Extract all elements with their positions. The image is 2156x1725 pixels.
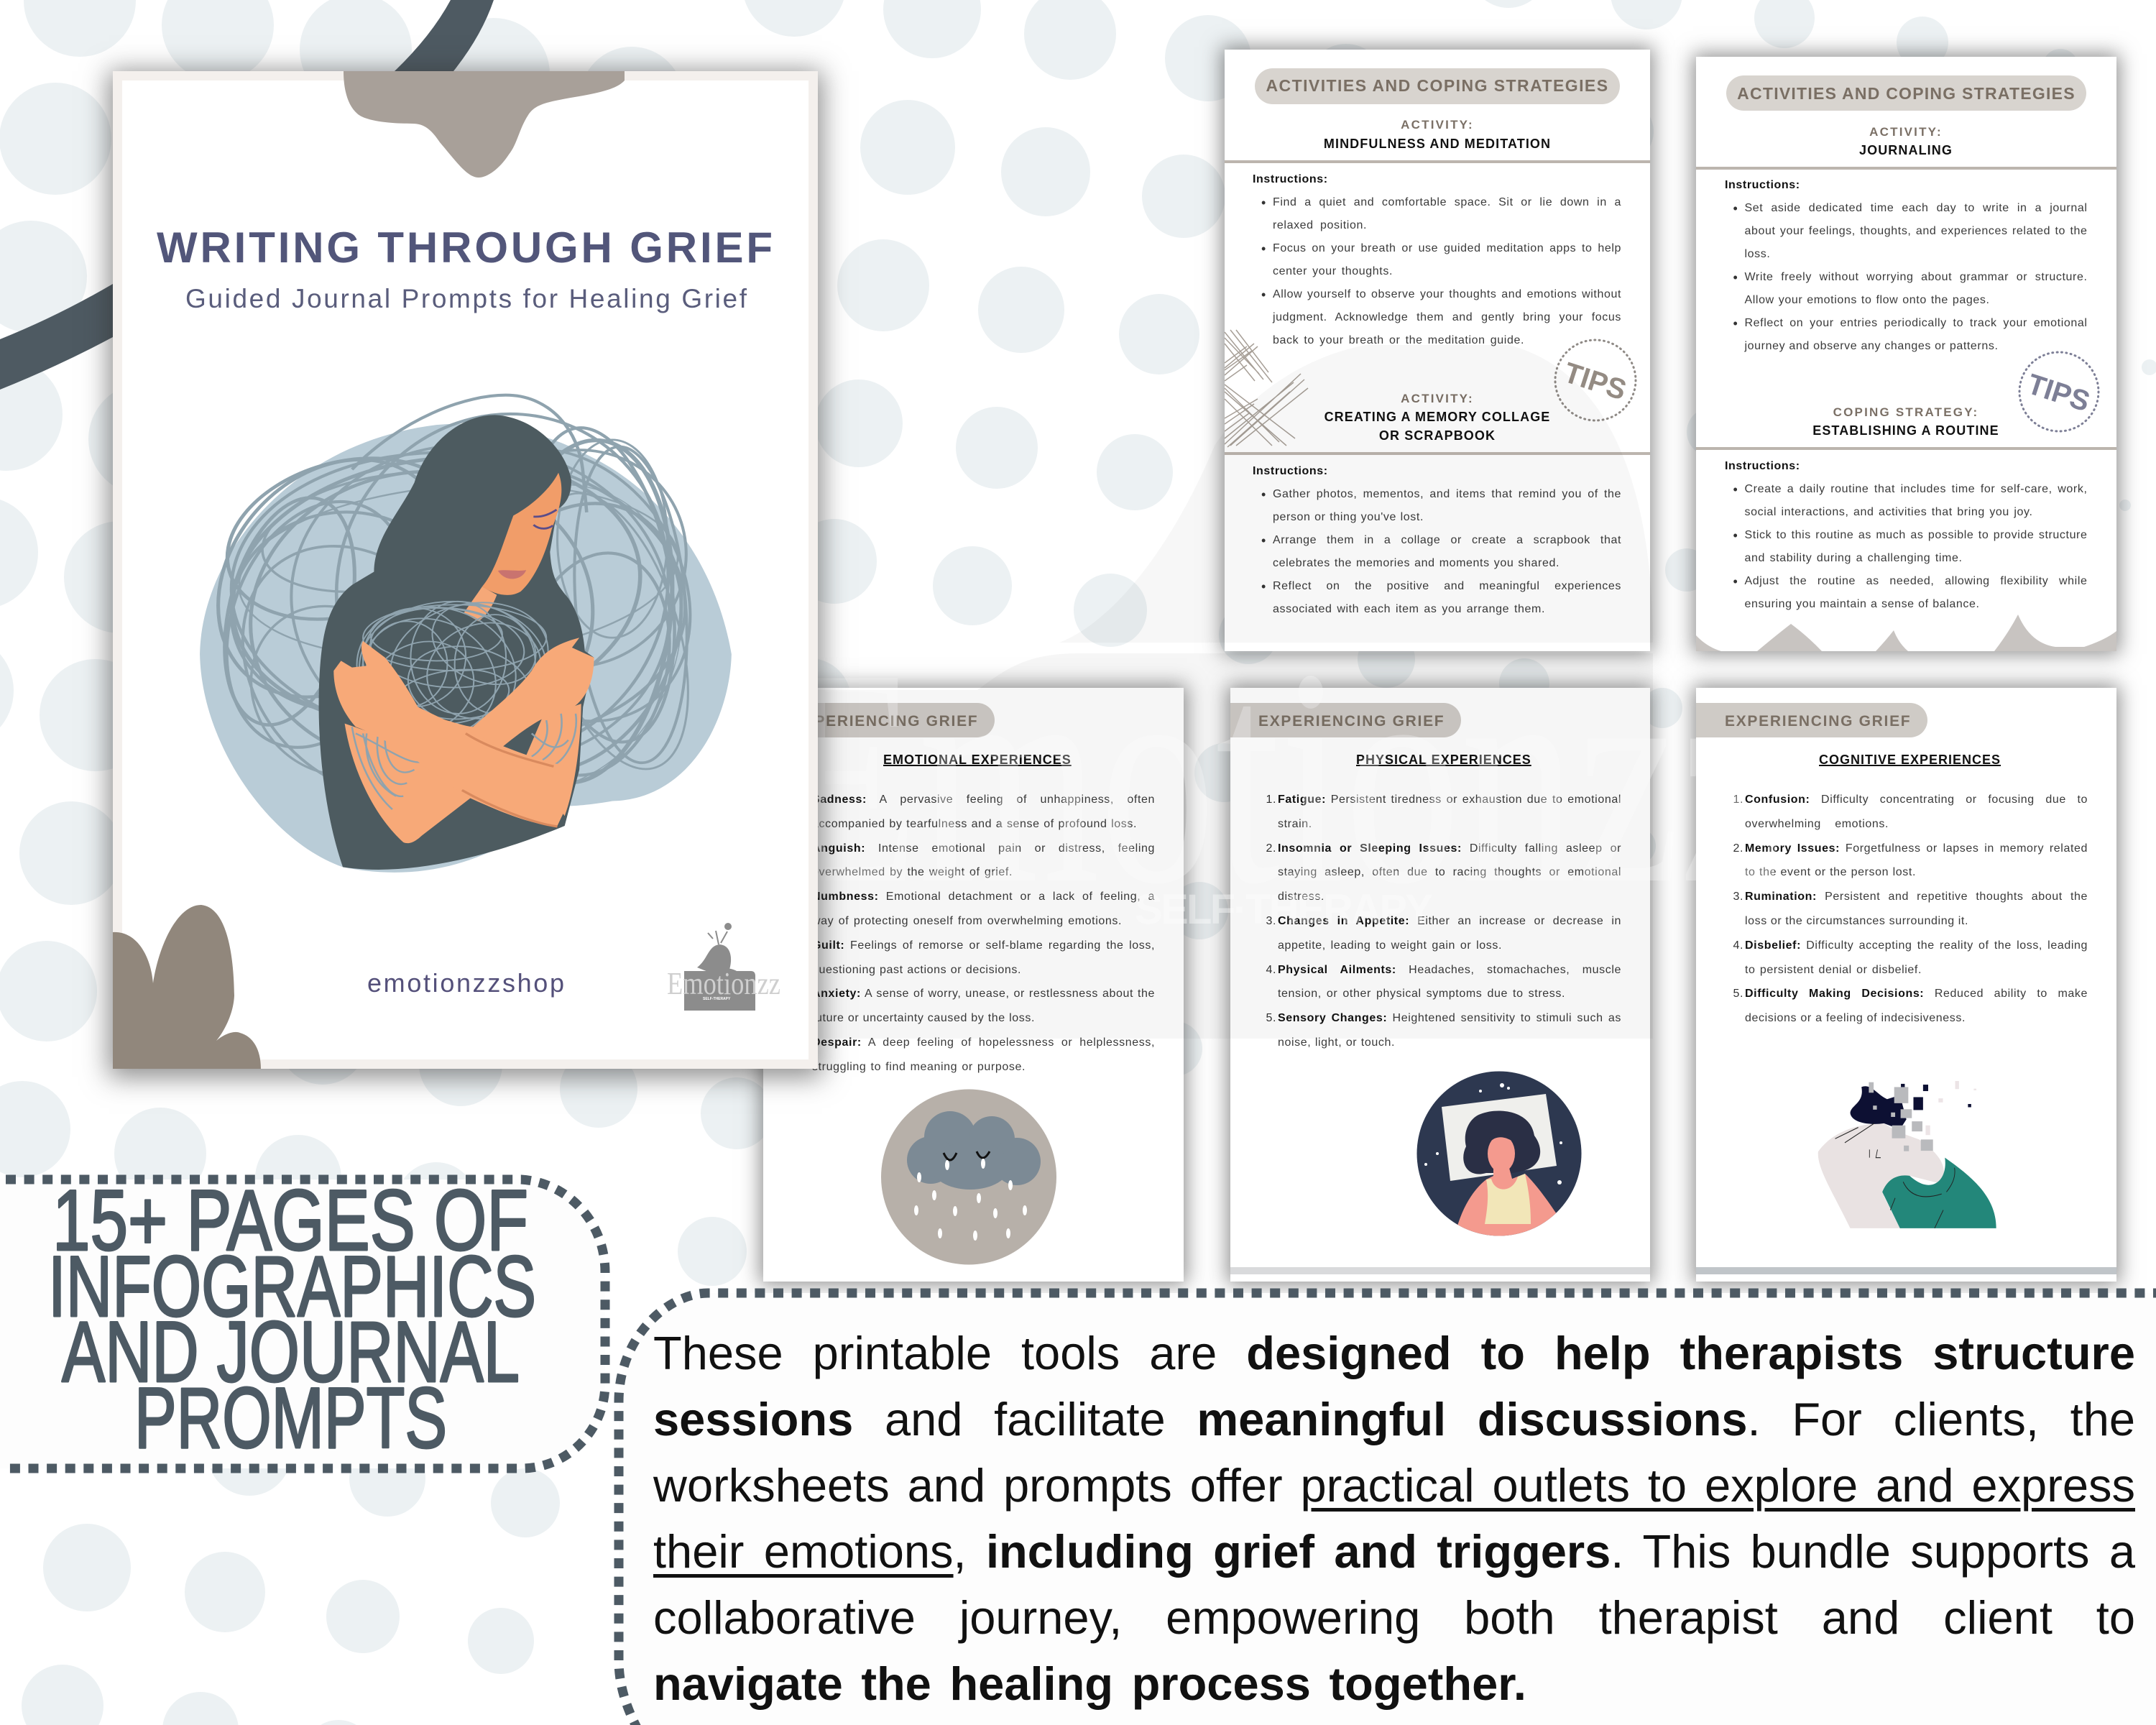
page: activities, journaling and routine [1696,57,2116,651]
cover: shop name: emotionzzshop [367,968,564,998]
cognitive experiences list: Difficulty Making Decisions: Reduced ability to make [1745,988,2088,1000]
icon: sleepless woman on pillow [1417,1071,1581,1236]
heading: COGNITIVE EXPERIENCES [1819,753,2001,767]
description paragraph: worksheets and prompts offer practical outlets to explore and express [653,1459,2135,1512]
bottom bar [1696,1267,2116,1274]
tips badge: TIPS [1560,356,1630,406]
instructions list [1733,201,2087,352]
dark ribbon behind the cover [0,0,494,390]
instructions label: Instructions: [1725,179,1800,191]
icon: person with dissolving head [1818,1081,1996,1229]
instructions label: Instructions: [1725,460,1800,472]
emotional experiences list: Anguish: Intense emotional pain or distress, feeling [812,842,1155,855]
callout text: 15+ PAGES OF [52,1172,528,1269]
instructions list: Stick to this routine as much as possible to provide structure [1745,529,2087,541]
activity title: JOURNALING [1859,143,1953,157]
cover: top grey blob [344,71,625,178]
activity title: MINDFULNESS AND MEDITATION [1324,137,1551,151]
emotional experiences list: overwhelmed by the weight of grief. [812,866,1013,878]
page: activities, mindfulness and memory collage: • [1261,242,1266,256]
bottom peaks decoration [1696,615,2116,651]
instructions list: Find a quiet and comfortable space. Sit or lie down in a [1273,196,1621,208]
instructions label: Instructions: [1253,465,1328,477]
page: activities, mindfulness and memory collage: • [1261,288,1266,302]
page: activities, journaling and routine: • [1733,270,1738,285]
instructions list [1261,487,1621,615]
section pill [1230,703,1461,737]
cognitive experiences list: Confusion: Difficulty concentrating or focusing due to [1745,794,2088,806]
description paragraph: sessions and facilitate meaningful discussions. For clients, the [653,1393,2135,1445]
page: activities, mindfulness and memory collage: • [1261,579,1266,594]
section pill [1255,68,1620,104]
instructions list: Reflect on the positive and meaningful experiences [1273,579,1621,592]
instructions list: Arrange them in a collage or create a scrapbook that [1273,533,1621,546]
page: cognitive experiences [1696,688,2116,1282]
watermark: faint Emotionzz logo over the pages: SELF·THERAPY [1135,886,1433,933]
cognitive experiences list: Disbelief: Difficulty accepting the reality of the loss, leading [1745,939,2088,952]
cover: brand logo: SELF-THERAPY [703,997,731,1001]
physical experiences list: Changes in Appetite: Either an increase or decrease in [1278,915,1621,927]
emotional experiences list: way of protecting oneself from overwhelming emotions. [812,915,1122,927]
callout text: INFOGRAPHICS [48,1238,536,1335]
activity label: ACTIVITY: [1401,118,1474,132]
page: activities, journaling and routine: • [1733,201,1738,216]
callout text: PROMPTS [134,1370,447,1466]
watermark: faint Emotionzz logo over the pages: Emotionzz [777,606,1783,948]
instructions list: Allow your emotions to flow onto the pages. [1745,294,1989,306]
emotional experiences list: accompanied by tearfulness and a sense of profound loss. [812,818,1137,830]
cognitive experiences list: decisions or a feeling of indecisiveness. [1745,1012,1966,1024]
page: cognitive experiences: 3. [1733,891,1743,903]
book cover [113,71,818,1069]
instructions list: and stability during a challenging time. [1745,552,1962,564]
cover: subtitle: Guided Journal Prompts for Healing Grief [185,284,747,313]
page: activities, journaling and routine: • [1733,316,1738,331]
page: physical experiences: 4. [1266,964,1276,976]
description panel frame [614,1288,2156,1725]
pill label: ACTIVITIES AND COPING STRATEGIES [1737,84,2076,103]
description paragraph: These printable tools are designed to help therapists structure [653,1327,2135,1379]
emotional experiences list [812,794,1155,1073]
callout: 15+ pages [6,1172,609,1473]
emotional experiences list: Sadness: A pervasive feeling of unhappiness, often [812,794,1155,806]
cover: illustration of woman hugging herself amid scribbles [172,390,737,873]
crosshatch decoration [1225,329,1308,447]
cognitive experiences list: to the event or the person lost. [1745,866,1916,878]
page: cognitive experiences: 5. [1733,988,1743,1000]
activity title: CREATING A MEMORY COLLAGE [1325,410,1550,424]
instructions list: Adjust the routine as needed, allowing flexibility while [1745,575,2087,587]
instructions list: associated with each item as you arrange them. [1273,602,1545,615]
cognitive experiences list [1733,794,2088,1024]
physical experiences list: Sensory Changes: Heightened sensitivity to stimuli such as [1278,1012,1621,1024]
page: activities, mindfulness and memory collage [1225,50,1650,651]
description paragraph: their emotions, including grief and triggers. This bundle supports a [653,1525,2135,1578]
emotional experiences list: Numbness: Emotional detachment or a lack of feeling, a [812,891,1155,903]
page: cognitive experiences: 4. [1733,939,1743,952]
activity title line 2: OR SCRAPBOOK [1379,428,1496,443]
emotional experiences list: Despair: A deep feeling of hopelessness or helplessness, [812,1036,1155,1049]
emotional experiences list: questioning past actions or decisions. [812,964,1021,976]
physical experiences list [1266,794,1621,1049]
callout text: AND JOURNAL [62,1304,520,1400]
physical experiences list: appetite, leading to weight gain or loss. [1278,939,1502,952]
cognitive experiences list: Memory Issues: Forgetfulness or lapses in memory related [1745,842,2088,855]
instructions list: Focus on your breath or use guided meditation apps to help [1273,242,1621,254]
instructions list: social interactions, and activities that bring you joy. [1745,506,2032,518]
emotional experiences list: Guilt: Feelings of remorse or self-blame regarding the loss, [812,939,1155,952]
instructions list: Reflect on your entries periodically to track your emotional [1745,317,2087,329]
emotional experiences list: future or uncertainty caused by the loss. [812,1012,1035,1024]
instructions list: relaxed position. [1273,219,1367,231]
instructions list: Set aside dedicated time each day to write in a journal [1745,202,2087,214]
instructions list [1261,196,1621,346]
section pill [763,703,995,737]
activity label: ACTIVITY: [1869,125,1943,139]
section label: EXPERIENCING GRIEF [1258,713,1445,730]
section pill [1726,75,2086,111]
page: activities, journaling and routine: • [1733,482,1738,497]
section label: EXPERIENCING GRIEF [792,713,978,730]
tips badge: TIPS [2024,368,2093,418]
physical experiences list: distress. [1278,891,1325,903]
instructions list: ensuring you maintain a sense of balance. [1745,598,1979,610]
instructions list: Create a daily routine that includes time for self-care, work, [1745,483,2087,495]
activity label: ACTIVITY: [1401,392,1474,405]
section label: EXPERIENCING GRIEF [1725,713,1911,730]
instructions list: judgment. Acknowledge them and gently bring your focus [1273,311,1621,323]
physical experiences list: staying asleep, often due to racing thoughts or emotional [1278,866,1621,878]
cognitive experiences list: overwhelming emotions. [1745,818,1889,830]
emotional experiences list: struggling to find meaning or purpose. [812,1061,1026,1073]
physical experiences list: noise, light, or touch. [1278,1036,1395,1049]
page: emotional experiences [763,688,1184,1282]
cognitive experiences list: loss or the circumstances surrounding it. [1745,915,1968,927]
tips badge [1554,339,1637,421]
instructions list [1733,482,2087,610]
page: activities, mindfulness and memory collage: • [1261,533,1266,548]
cover: title: WRITING THROUGH GRIEF [157,224,773,272]
page: activities, journaling and routine: • [1733,574,1738,589]
cognitive experiences list: Rumination: Persistent and repetitive thoughts about the [1745,891,2088,903]
pill label: ACTIVITIES AND COPING STRATEGIES [1266,76,1609,95]
cognitive experiences list: to persistent denial or disbelief. [1745,964,1922,976]
instructions list: about your feelings, thoughts, and experiences related to the [1745,225,2087,237]
physical experiences list: strain. [1278,818,1312,830]
instructions list: person or thing you've lost. [1273,510,1424,523]
page: physical experiences: 3. [1266,915,1276,927]
coping strategy label: COPING STRATEGY: [1833,405,1978,419]
instructions list: Gather photos, mementos, and items that remind you of the [1273,487,1621,500]
description paragraph: collaborative journey, empowering both therapist and client to [653,1591,2135,1644]
section pill [1696,703,1927,737]
callout text [48,1172,536,1466]
heading: PHYSICAL EXPERIENCES [1356,753,1531,767]
page: physical experiences: 5. [1266,1012,1276,1024]
cover: bottom-left plant shape [113,905,261,1069]
physical experiences list: Fatigue: Persistent tiredness or exhaustion due to emotional [1278,794,1621,806]
page: physical experiences: 1. [1266,794,1276,806]
cover: brand logo: Emotionzz [667,966,780,1001]
heading: EMOTIONAL EXPERIENCES [883,753,1072,767]
icon: crying rain cloud [881,1090,1056,1265]
physical experiences list: Insomnia or Sleeping Issues: Difficulty falling asleep or [1278,842,1621,855]
description paragraph: navigate the healing process together. [653,1657,1526,1710]
instructions list: Write freely without worrying about grammar or structure. [1745,271,2087,283]
cover: brand logo [667,923,780,1011]
instructions list: Allow yourself to observe your thoughts and emotions without [1273,288,1621,300]
instructions list: loss. [1745,248,1770,260]
instructions list: journey and observe any changes or patterns. [1745,340,1998,352]
page: physical experiences [1230,688,1650,1282]
page: activities, journaling and routine: • [1733,528,1738,543]
page: cognitive experiences: 2. [1733,842,1743,855]
emotional experiences list: Anxiety: A sense of worry, unease, or restlessness about the [812,988,1155,1000]
page: activities, mindfulness and memory collage: • [1261,196,1266,210]
page: physical experiences: 2. [1266,842,1276,855]
physical experiences list: tension, or other physical symptoms due to stress. [1278,988,1565,1000]
coping strategy title: ESTABLISHING A ROUTINE [1812,423,1999,438]
description paragraph [653,1327,2136,1710]
page: cognitive experiences: 1. [1733,794,1743,806]
instructions list: back to your breath or the meditation guide. [1273,334,1524,346]
tips badge [2018,351,2100,433]
instructions list: celebrates the memories and moments you shared. [1273,556,1560,569]
page: activities, mindfulness and memory collage: • [1261,487,1266,502]
instructions label: Instructions: [1253,173,1328,185]
physical experiences list: Physical Ailments: Headaches, stomachaches, muscle [1278,964,1621,976]
bottom bar [1230,1267,1650,1274]
instructions list: center your thoughts. [1273,265,1393,277]
